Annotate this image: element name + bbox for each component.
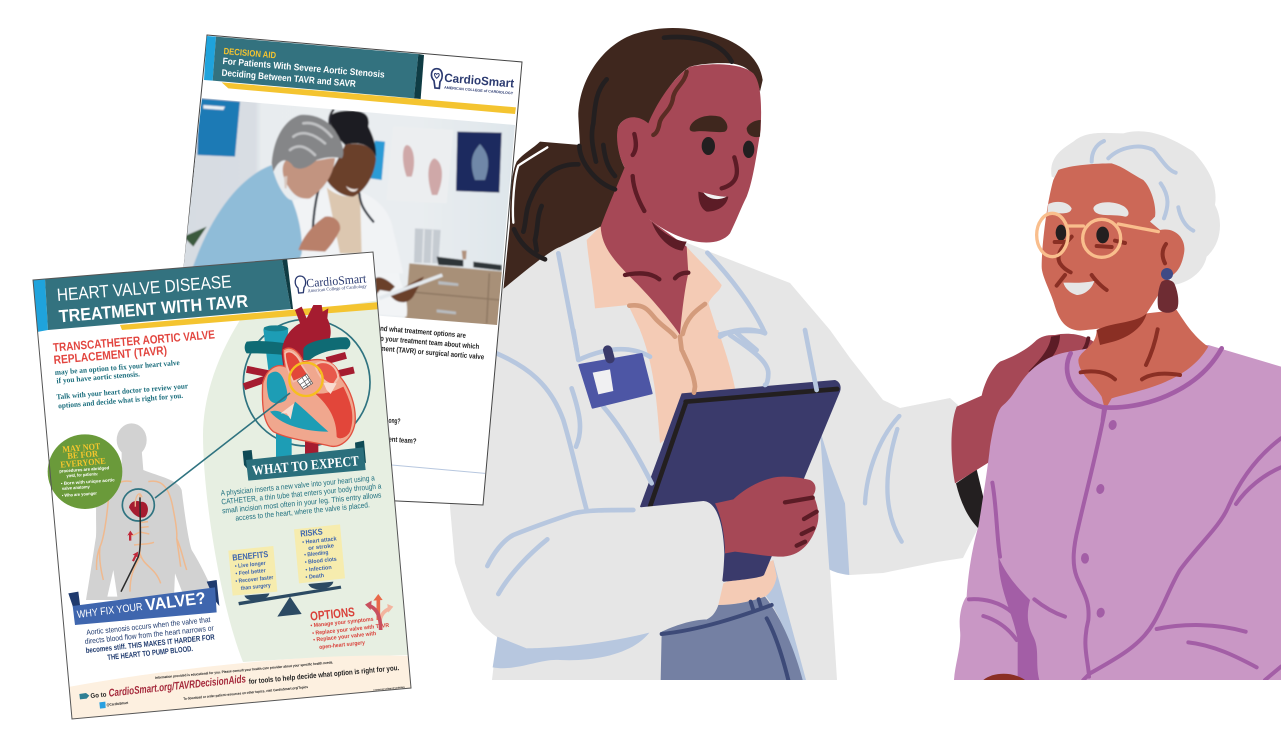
yellow stripe [222,82,516,114]
left eye [1056,225,1066,241]
callout heading 3: EVERYONE [60,456,106,470]
heart body [262,348,355,446]
arrow left head [365,601,372,610]
doctor ponytail and hair [503,28,763,290]
badge window [593,369,613,394]
url: CardioSmart.org/TAVRDecisionAids [108,673,247,700]
arrow left [369,606,381,630]
benefit 3: • Recover faster [235,575,274,585]
title line 1: For Patients With Severe Aortic Stenosis [222,56,385,80]
chin shadow [652,222,687,251]
lens ring [122,489,154,521]
heading line 2: REPLACEMENT (TAVR) [53,343,167,367]
right ventricle [270,402,328,432]
advice line 2: options and decide what is right for you. [58,391,183,410]
benefits note [228,546,277,596]
poster logo bulb [295,276,306,293]
text fragment: question: ong? [388,416,401,426]
doctor lab coat [450,227,978,680]
right eyebrow [1093,202,1129,217]
note paper [228,546,277,596]
risk 1 continued: or stroke [308,543,334,552]
shirt placket [680,350,698,395]
stethoscope [313,190,373,232]
face lines [1055,237,1180,379]
hair strands [1092,141,1193,231]
descending aorta [305,440,318,457]
benefits heading: BENEFITS [232,549,269,563]
ribbon label: WHAT TO EXPECT [252,454,360,479]
sleeve creases [865,416,902,542]
arm gap left [107,570,117,597]
badge clip [608,350,610,359]
doctor turtleneck [327,187,362,253]
flow arrow upper [127,531,133,541]
text line 3: ment (TAVR) or surgical aortic valve [380,344,485,361]
heading: TAVR: TRANSCATHETER AORTIC VALVE [52,327,215,355]
risk 3: • Blood clots [305,557,337,566]
doctor hair [329,111,376,157]
small heart lens [121,489,154,592]
back page body text [380,324,485,473]
poster title line 2: TREATMENT WITH TAVR [58,291,249,326]
intro line 2: if you have aortic stenosis. [56,369,140,385]
nose, neck and collarbone lines [625,134,737,279]
arrow right [380,608,390,620]
doctor face [327,144,376,197]
shirt at waist [718,560,777,605]
what to expect ribbon [243,441,366,481]
arrow right head [387,604,393,613]
patient hair back [1051,131,1220,285]
photo: patient and doctor [184,98,515,325]
superior vena cava [263,326,288,370]
teal banner [213,37,418,98]
sweater seams [969,410,1281,680]
explanation line 4: THE HEART TO PUMP BLOOD. [107,644,193,662]
front page sheet [33,252,411,719]
explanation line 2: directs blood flow from the heart narrows or [84,623,215,646]
disclaimer: Information provided is educational for you. Please consult your health care provider about your specific health needs. [155,660,333,680]
arm gap right [174,573,184,597]
back page sheet [162,35,522,505]
mouth [698,192,728,212]
face [1042,163,1184,331]
expect line 4: access to the heart, where the valve is placed. [235,500,370,523]
lower vena cava [276,433,292,460]
left eyebrow [1047,202,1072,213]
collar [1067,348,1222,408]
callout heading 2: BE FOR [67,448,99,461]
title line 2: Deciding Between TAVR and SAVR [221,68,356,89]
green callout circle [48,434,122,509]
left eyebrow [690,116,727,132]
why fix ribbon [68,580,219,625]
callout heading 1: MAY NOT [62,441,101,454]
trousers [661,597,803,680]
smile [1063,281,1094,295]
earring drop [1158,280,1178,313]
options arrows [365,594,393,630]
earring stud [1161,268,1173,280]
small heart [129,501,148,518]
right eye [743,141,754,158]
call to action end: for tools to help decide what option is right for you. [248,663,400,686]
sweater fold [998,557,1039,680]
poster logo subtitle: American College of Cardiology [307,284,368,294]
hand holding tablet [715,477,818,557]
button 4 [1096,607,1106,619]
scale pan right [308,582,333,589]
document: decision aid (back) [162,35,523,505]
left tail [68,592,81,613]
cream footer band [68,655,415,722]
explanation line 1: Aortic stenosis occurs when the valve that [86,615,212,637]
figure: patient [865,131,1281,680]
ribbon band [246,447,366,481]
go to: Go to [90,692,107,700]
note paper [294,524,345,583]
arrow up head [373,594,383,601]
coat creases [487,330,817,594]
ribbon left tail [243,450,253,470]
risks heading: RISKS [300,526,323,539]
footer rule [392,465,485,473]
shirt tan lines [629,304,705,350]
shirt [640,330,735,443]
finger lines [785,498,817,546]
tablet [640,380,841,582]
tendons [281,383,337,419]
doctor collar, neck and head [514,37,765,350]
finger shadow [1028,335,1060,372]
doctor hand, sweater and details [865,334,1281,680]
scale pan left [244,593,269,601]
patient sweater [187,165,302,287]
left atrium [315,362,338,384]
pulmonary artery right [303,337,350,360]
poster content lower [68,473,406,709]
blue band [73,587,217,625]
heart illustration [243,305,370,460]
arrow up [373,600,384,620]
poster content upper [52,271,368,410]
callout text 5: • Who are younger [62,491,97,498]
options heading: OPTIONS [310,605,355,624]
copyright: © American College of Cardiology [373,686,406,692]
silhouette with arteries [86,423,217,600]
benefit 3 continued: than surgery [241,583,272,592]
silhouette body [86,450,217,600]
blue strip [204,36,216,81]
patient earring [284,176,287,188]
neck [1078,310,1208,410]
vena cava opening [264,325,288,331]
valve highlight ring [289,363,323,396]
download note: To download or order patient resources on other topics, visit CardioSmart.org/Topics [183,685,308,701]
button 2 [1095,483,1105,495]
expect line 3: small incision most often in your leg. This entry allows [222,490,382,515]
risks note [294,524,345,583]
aorta [282,305,331,367]
doctor coat lining, shirt, trousers and tablet [487,330,849,680]
hair highlights [290,123,332,155]
figure: doctor [450,28,978,680]
hand at hem [983,674,1025,680]
expect line 1: A physician inserts a new valve into your heart using a [220,473,376,498]
intro line 1: may be an option to fix your heart valve [54,358,181,377]
tablet edge [650,389,837,507]
patient hair [272,115,343,172]
advice line 1: Talk with your heart doctor to review your [56,381,189,401]
dark banner end [414,54,424,99]
glasses [1037,213,1158,257]
benefit 2: • Feel better [235,568,267,577]
right eye [1096,227,1109,243]
twitter icon [99,702,106,709]
hair lines [514,37,732,259]
header teal banner [45,259,291,330]
id badge [579,354,652,408]
small heart vessels [135,494,142,507]
text line 1: nd what treatment options are [380,324,466,340]
explanation line 3: becomes stiff. THIS MAKES IT HARDER FOR [85,632,216,655]
aortic root [285,352,308,382]
finger line [1082,338,1088,353]
hair strand [653,72,687,135]
ribbon right tail [355,441,366,463]
silhouette head [117,423,147,457]
risk 5: • Death [305,573,325,581]
trouser seams [662,599,788,680]
twitter handle: @CardioSmart [106,701,129,707]
face [617,64,761,243]
tag icon [79,693,89,699]
patient head [1037,141,1222,420]
catheter [121,497,140,592]
flow arrow lower [132,552,138,562]
doctor hand on shoulder [951,334,1098,483]
hair band [329,110,333,126]
text fragment: team: ent team? [388,434,417,446]
pulmonary vessels right [327,355,354,374]
pulmonary vessels left [244,369,270,387]
green panel [203,300,412,662]
heart circle [243,319,370,446]
option 1: • Manage your symptoms [310,617,374,629]
coat lining lower left [493,633,649,668]
left ventricle [315,387,352,438]
collar lines [558,253,765,350]
patient face [283,158,335,199]
pointer line to small heart [155,393,290,498]
scale base [277,597,302,617]
praying hands [298,216,340,252]
doctor coat in photo [293,187,403,273]
document: heart valve disease poster (front) [33,252,415,722]
logo subtitle: AMERICAN COLLEGE of CARDIOLOGY [444,86,514,96]
button 1 [1108,419,1118,431]
scale beam [238,586,341,605]
valve mesh [300,375,311,387]
button 3 [1081,553,1089,564]
callout text 1: procedures are abridged [59,465,110,474]
back page header [204,36,516,114]
poster logo wordmark: CardioSmart [306,271,367,290]
pulmonary artery left [245,341,287,355]
logo bulb [431,69,442,88]
risk 2: • Bleeding [304,550,329,559]
sweater [954,345,1281,680]
valve stent [297,374,313,389]
label: decision aid: DECISION AID [223,46,277,60]
option 3 continued: open-heart surgery [319,640,366,651]
photo cabinet and hands [357,190,503,327]
poster title line 1: HEART VALVE DISEASE [56,271,232,305]
risk 1: • Heart attack [302,536,338,546]
risk 4: • Infection [305,565,333,574]
callout text 4: valve anatomy [62,484,91,491]
teeth [703,192,727,199]
option 2: • Replace your valve with TAVR [312,623,389,637]
right tail [207,580,219,606]
coat lining front [765,560,806,680]
chin shadow [1097,313,1147,345]
doctor smile [346,186,358,192]
forearm sleeve [640,501,724,620]
right eyebrow [747,120,761,137]
placket top [1103,408,1104,420]
callout text 3: • Born with unique aortic [61,477,116,486]
header dark end [282,258,293,309]
balance scale [238,582,341,617]
arteries [96,481,187,592]
benefit 1: • Live longer [235,561,267,570]
header blue strip [33,279,48,332]
front page outline [33,252,411,719]
option 3: • Replace your valve with [313,631,377,644]
coat lining right [820,430,849,575]
expect line 2: CATHETER, a thin tube that enters your body through a [221,481,382,506]
header yellow stripe [120,302,381,330]
left eye [702,137,715,155]
ribbon text 2: VALVE? [144,588,207,615]
ribbon text 1: WHY FIX YOUR [76,601,143,621]
text line 2: p your treatment team about which [380,334,480,351]
collar and chest [587,227,723,350]
callout text 2: yield, for patients: [66,471,99,478]
under sleeve dark [956,469,984,528]
green disc [48,434,122,509]
photo room background [184,98,515,318]
photo people [187,110,403,287]
logo wordmark: CardioSmart [444,71,515,91]
neck [601,167,688,335]
right atrium [267,372,287,403]
